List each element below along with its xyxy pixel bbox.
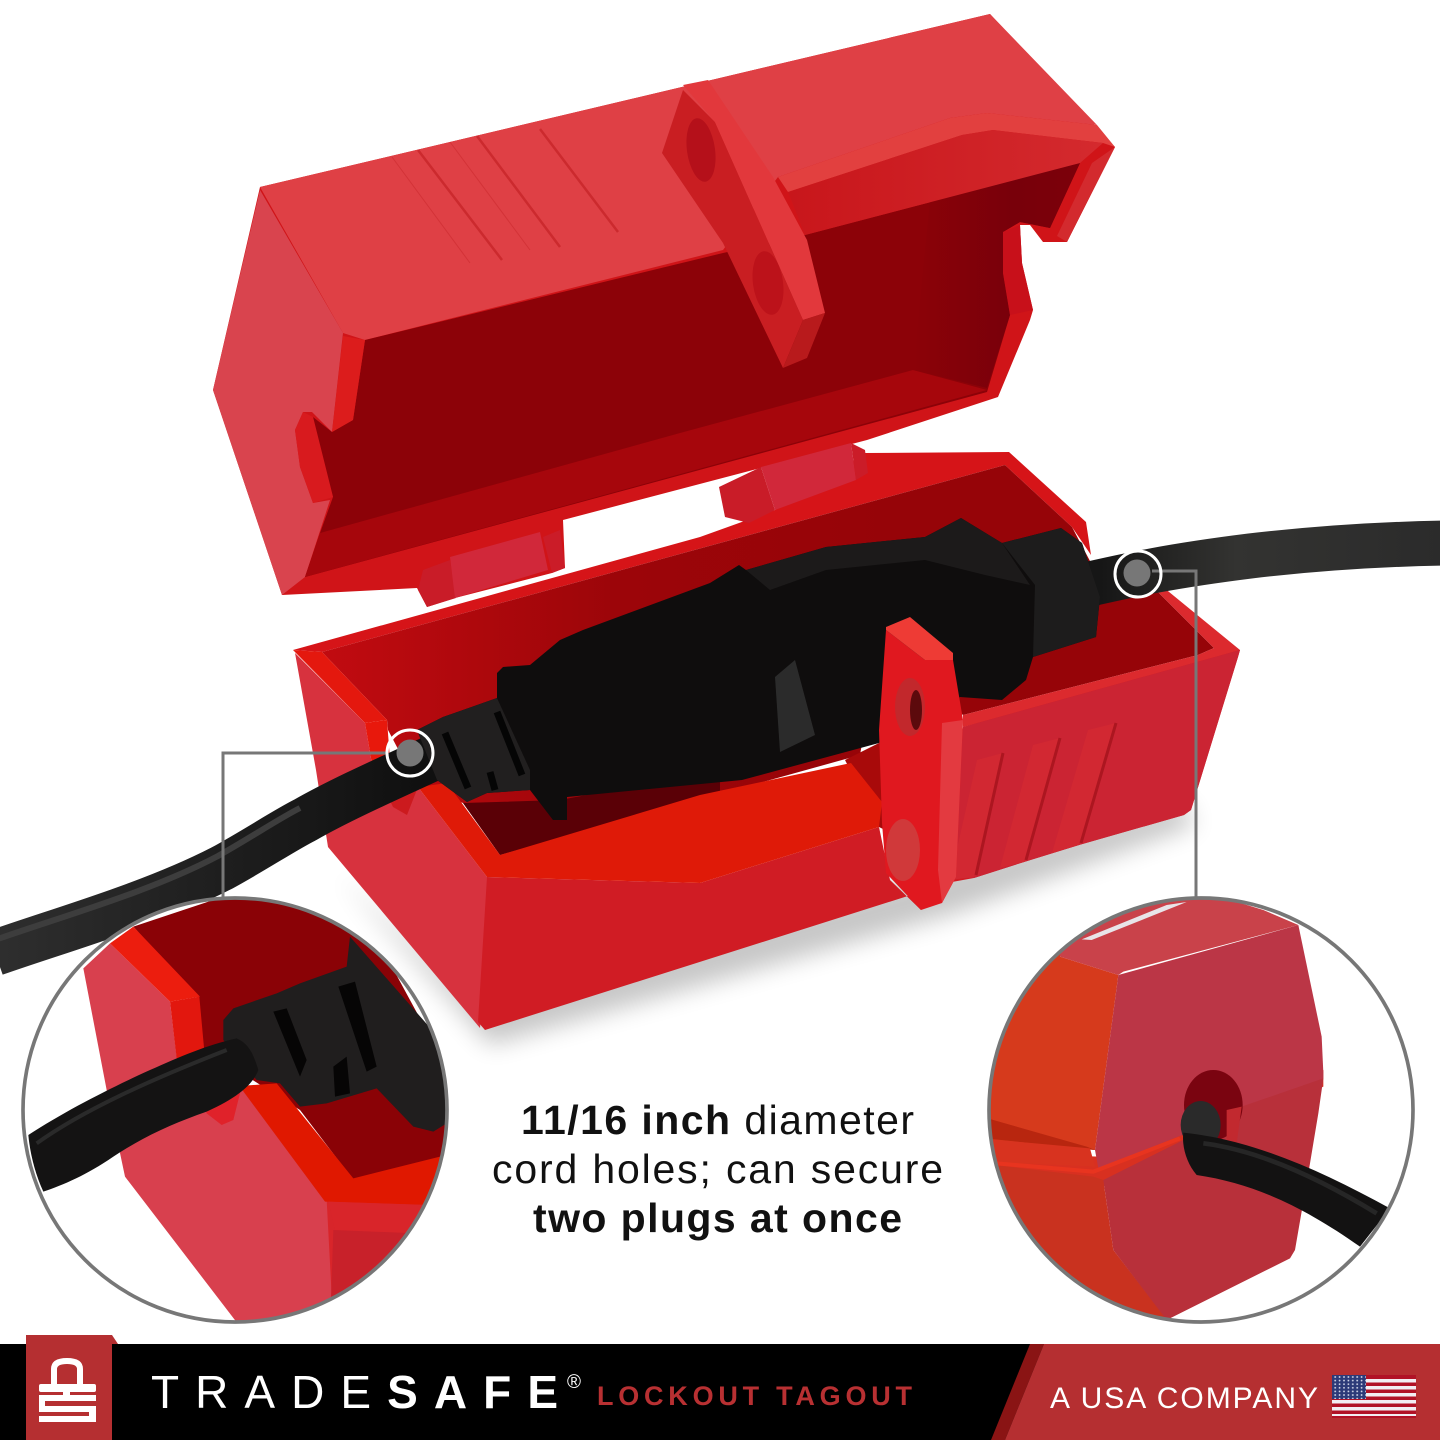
icon: american flag bbox=[1332, 1375, 1416, 1418]
lid: hinge left bbox=[418, 530, 565, 607]
caption line 3: two plugs at once bbox=[533, 1195, 902, 1241]
marker: right cord hole bbox=[1115, 551, 1161, 597]
lid: interior lower wall bbox=[305, 370, 987, 577]
lid: top face bbox=[260, 14, 1097, 340]
footer band bbox=[0, 1335, 1440, 1440]
plug: black connector bbox=[417, 518, 1100, 820]
tagline: LOCKOUT TAGOUT bbox=[597, 1381, 912, 1411]
box: floor bbox=[463, 770, 720, 855]
box: front ribs bbox=[950, 723, 1116, 880]
detail circle: right cord hole bbox=[970, 887, 1413, 1327]
box: right front face tint bbox=[952, 650, 1240, 878]
box: left end face bbox=[295, 653, 490, 1028]
lid: right notch piece bbox=[1003, 225, 1033, 315]
lid: interior right wall bbox=[913, 163, 1080, 388]
plug: upper sheen bbox=[746, 518, 1030, 590]
box: front face bbox=[478, 650, 1240, 1030]
brand name: TRADE SAFE bbox=[151, 1366, 558, 1418]
lid: left rim piece bbox=[332, 336, 365, 432]
product: open lockout box bbox=[0, 14, 1440, 1030]
box: cord notch bbox=[385, 787, 418, 815]
logo tab bbox=[26, 1335, 118, 1440]
lid: upper lip bbox=[778, 113, 1115, 192]
box: left rim bbox=[293, 650, 387, 723]
plug: relief slots bbox=[445, 712, 522, 790]
tab slot bbox=[845, 740, 885, 830]
plug: right grip bbox=[1002, 528, 1100, 657]
cord: right bbox=[1090, 543, 1440, 584]
box: back rim bbox=[293, 452, 1091, 652]
registered mark: ® bbox=[567, 1372, 581, 1393]
lower mounting flange bbox=[879, 617, 963, 910]
icon: padlock logo bbox=[39, 1361, 96, 1422]
caption bbox=[492, 1097, 943, 1241]
upper mounting flange bbox=[662, 80, 825, 368]
box drop shadow bbox=[340, 800, 1195, 1045]
detail circle: left cord hole bbox=[23, 893, 453, 1327]
callout line: left bbox=[223, 753, 386, 900]
box: interior bbox=[322, 465, 1214, 855]
box: front rim and tab bbox=[418, 763, 882, 883]
lid: left end face bbox=[213, 190, 343, 595]
cord: left bbox=[0, 757, 435, 953]
box: left vertical rim bbox=[365, 720, 390, 770]
lid: silhouette and lower rim bbox=[213, 14, 1115, 607]
lid: right rim bbox=[1057, 147, 1115, 242]
callout line: right bbox=[1152, 571, 1196, 900]
lid: hinge right bbox=[719, 443, 868, 523]
footer: red panel bbox=[1005, 1344, 1440, 1440]
caption line 2: cord holes; can secure bbox=[492, 1146, 943, 1192]
marker: left cord hole bbox=[387, 730, 433, 776]
plug: strain relief bbox=[417, 698, 530, 802]
plug: highlight bbox=[775, 660, 815, 752]
footer: dark red stripe bbox=[991, 1344, 1044, 1440]
lid: interior bbox=[305, 163, 1080, 577]
plug: body bbox=[417, 518, 1100, 820]
usa company label: A USA COMPANY bbox=[1050, 1382, 1318, 1415]
lid: left notch edge bbox=[295, 412, 333, 503]
box: right end rim bbox=[963, 578, 1240, 727]
lid: top ribs bbox=[392, 129, 618, 263]
lid: inner lip face bbox=[788, 130, 1103, 235]
caption line 1: 11/16 inch diameter bbox=[521, 1097, 914, 1143]
